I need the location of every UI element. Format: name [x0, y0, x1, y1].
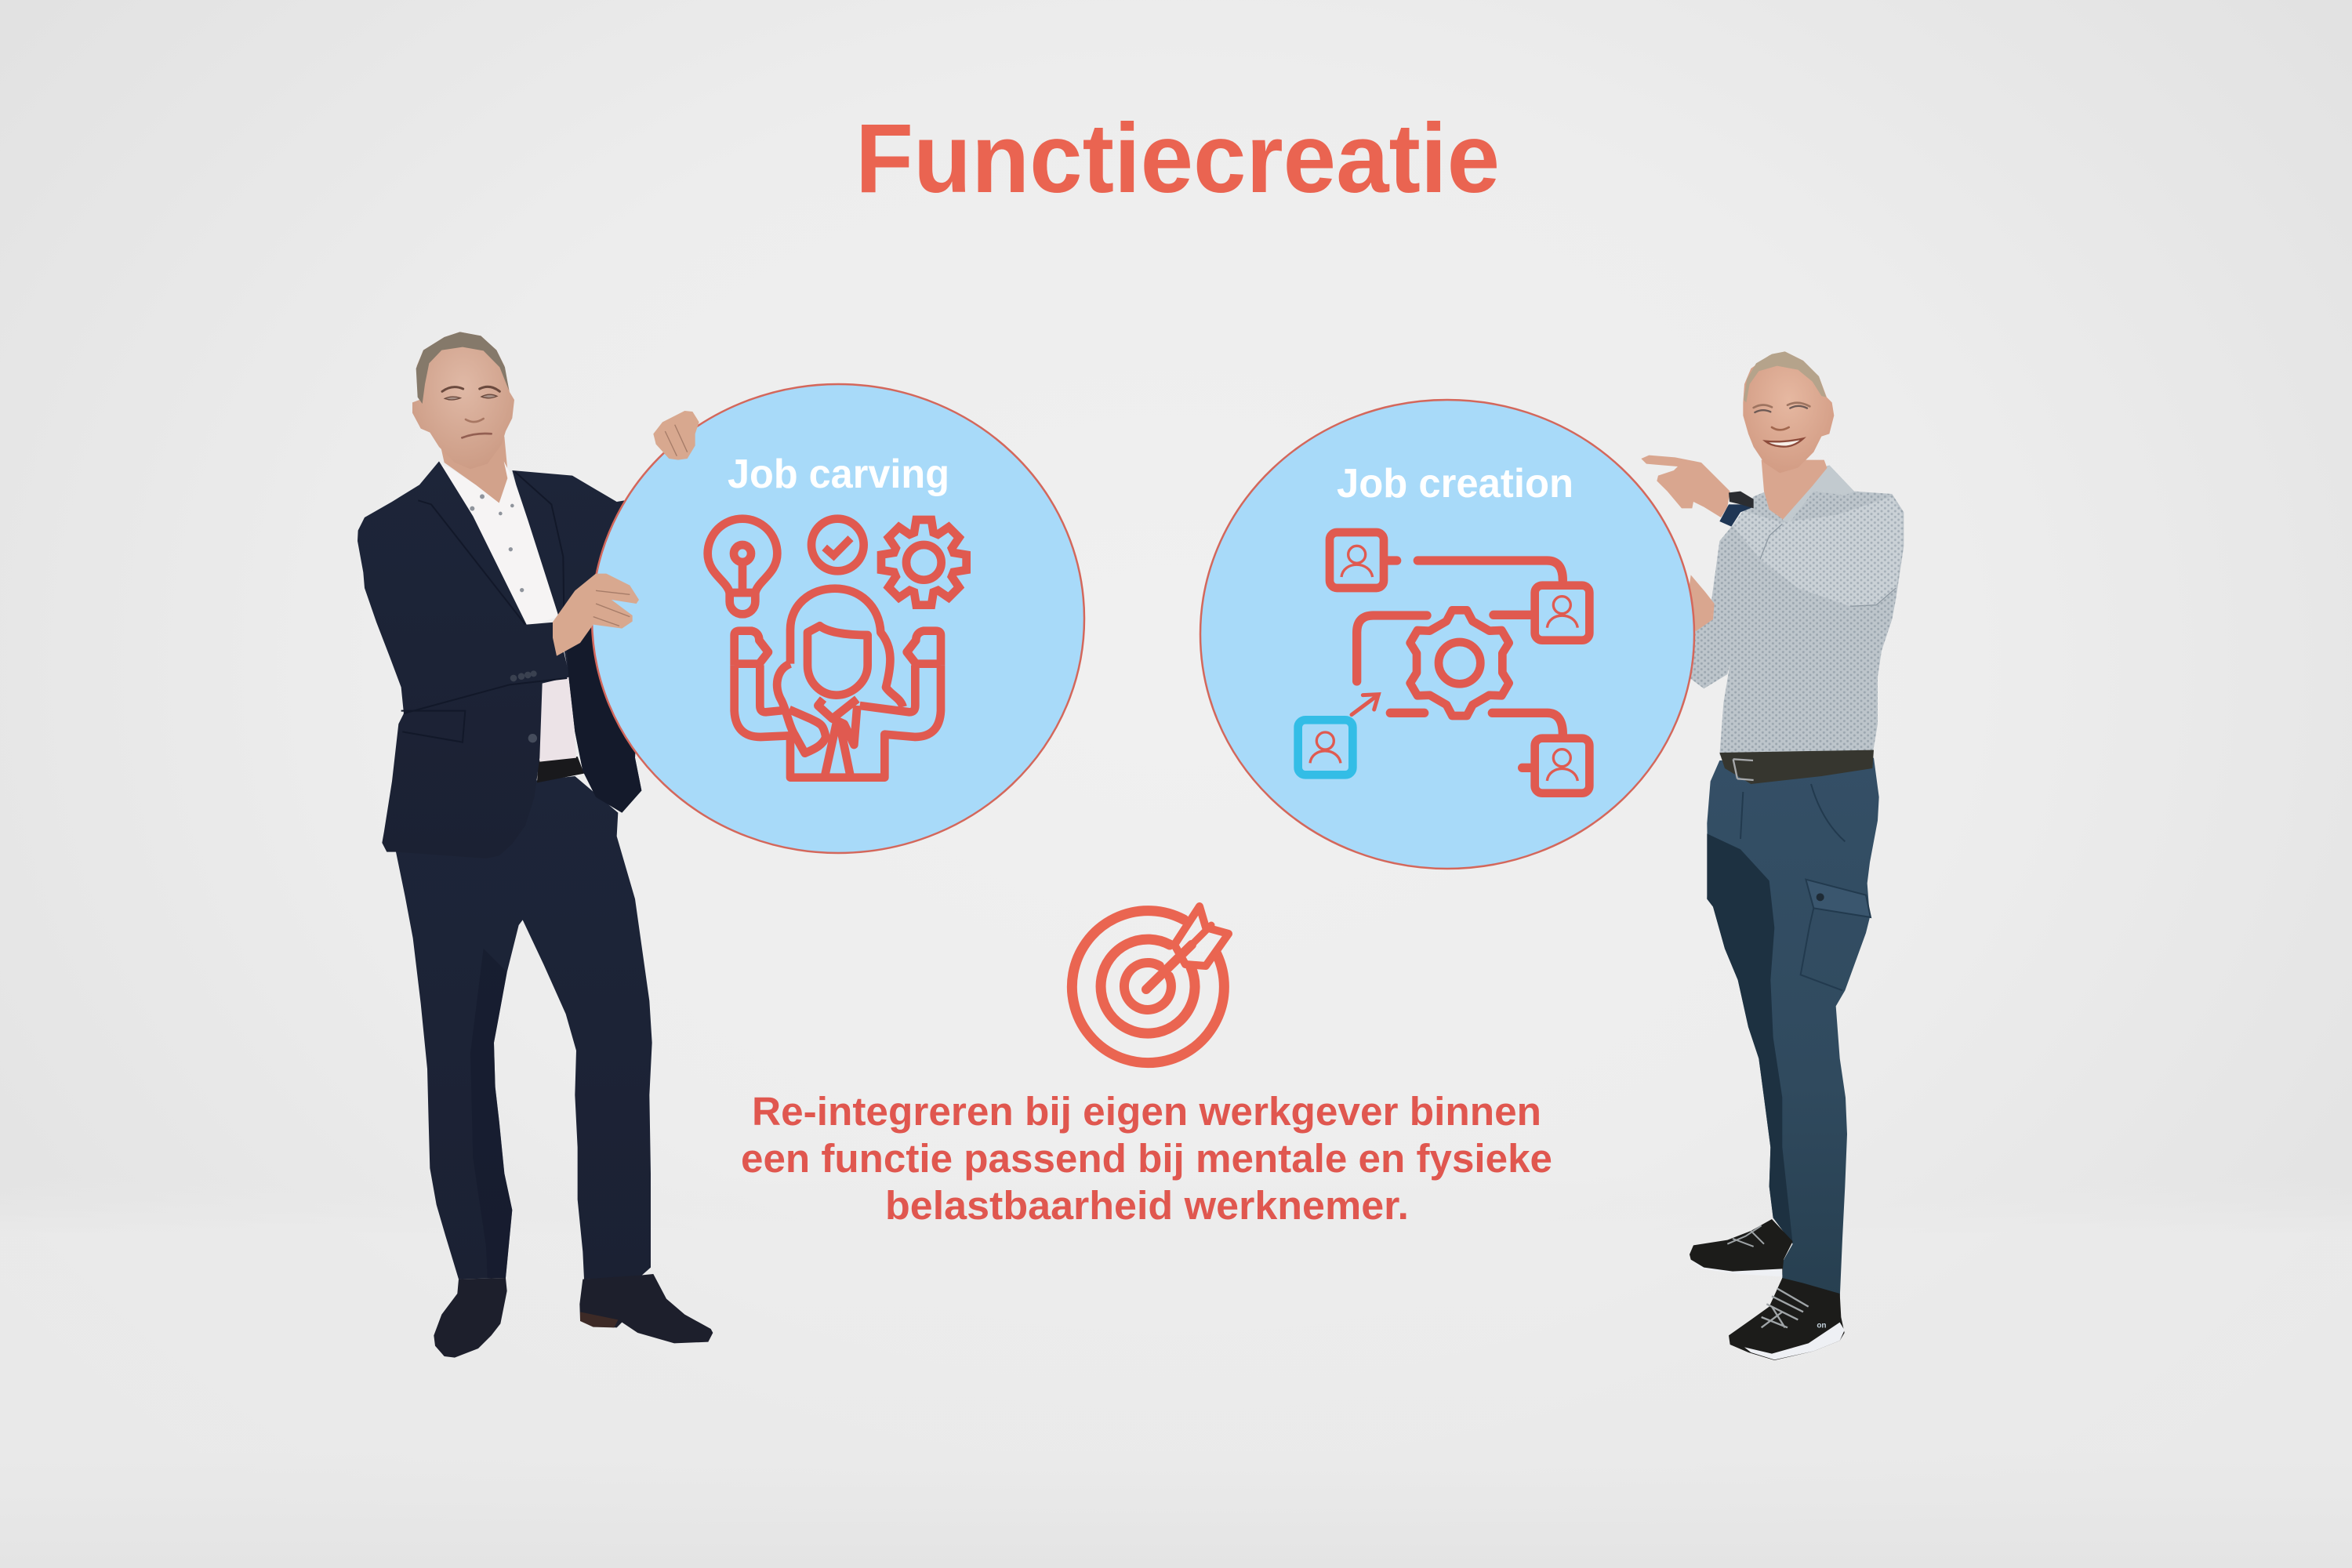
panel: job carving circle	[592, 384, 1084, 853]
icon: gear	[1410, 610, 1509, 716]
jacket button	[528, 734, 537, 742]
front shoe sole	[1744, 1323, 1845, 1359]
panel: job creation circle	[1200, 400, 1694, 869]
front shoe	[1729, 1278, 1845, 1360]
title: Functiecreatie	[855, 104, 1500, 213]
trousers	[396, 776, 652, 1279]
tile: middle-right person	[1535, 586, 1589, 641]
belt	[1719, 750, 1874, 784]
icon: target with arrow	[1072, 906, 1229, 1063]
circle background	[592, 384, 1084, 853]
hair	[416, 332, 509, 404]
holding hand	[1688, 575, 1715, 631]
icon: gear	[881, 520, 967, 605]
face features	[442, 387, 499, 437]
wristwatch	[1719, 504, 1754, 527]
person: left man in navy suit	[358, 332, 713, 1358]
right shoe heel	[580, 1312, 618, 1327]
description text: een functie passend bij mentale en fysieke	[741, 1136, 1552, 1181]
smile	[1766, 438, 1803, 447]
rear shoe sole	[1691, 1260, 1782, 1276]
rear shoe laces	[1727, 1225, 1764, 1247]
hands of left man over the circle	[553, 411, 699, 656]
neck	[1762, 460, 1828, 523]
lower shirt	[539, 661, 576, 762]
pointing hand	[1641, 456, 1730, 517]
jacket dark side	[564, 583, 641, 813]
circle background	[1200, 400, 1694, 869]
sleeve	[1733, 496, 1903, 606]
sleeve buttons	[510, 670, 537, 681]
head	[1743, 351, 1834, 473]
rear shoe	[1690, 1219, 1793, 1276]
connectors	[1357, 561, 1563, 768]
description text	[741, 1089, 1552, 1228]
heading: job carving: Job carving	[728, 452, 949, 497]
shirt body	[1688, 465, 1904, 755]
description text: Re-integreren bij eigen werkgever binnen	[752, 1089, 1541, 1134]
left shoe	[434, 1278, 507, 1358]
belt buckle	[1733, 759, 1754, 780]
lower hand	[553, 574, 639, 656]
description text: belastbaarheid werknemer.	[885, 1183, 1409, 1228]
upper hand	[653, 411, 699, 460]
cargo pocket	[1740, 784, 1871, 990]
collar	[1782, 465, 1854, 523]
neck	[439, 437, 508, 503]
tile: top-left person	[1330, 532, 1384, 588]
head	[412, 332, 514, 469]
shoe logo: on	[1817, 1321, 1827, 1330]
face features	[1754, 403, 1809, 430]
tile: blue new person	[1298, 720, 1352, 775]
heading: job creation: Job creation	[1337, 461, 1573, 506]
arrow	[1352, 695, 1378, 715]
dark rear leg	[1707, 833, 1793, 1244]
icon: light bulb	[708, 519, 777, 614]
hair	[1744, 351, 1826, 402]
cargo pocket button	[1817, 893, 1824, 901]
jacket left panel and sleeve	[358, 461, 570, 858]
trouser shadows	[470, 949, 512, 1278]
belt	[537, 757, 584, 782]
right shoe	[579, 1274, 713, 1343]
lapels and pocket	[401, 472, 567, 742]
front shoe laces	[1762, 1288, 1809, 1327]
upper shirt	[438, 461, 558, 627]
shirt buttons	[470, 494, 524, 592]
jacket right panel	[512, 470, 645, 813]
icon: org flow with gear	[1298, 532, 1589, 793]
person: right man in patterned shirt	[1641, 351, 1904, 1360]
icon: woman with idea, check and gear	[708, 519, 967, 778]
tile: bottom-right person	[1535, 739, 1589, 793]
jeans	[1707, 758, 1879, 1299]
icon: check mark	[811, 519, 864, 571]
icon: woman	[735, 589, 941, 778]
